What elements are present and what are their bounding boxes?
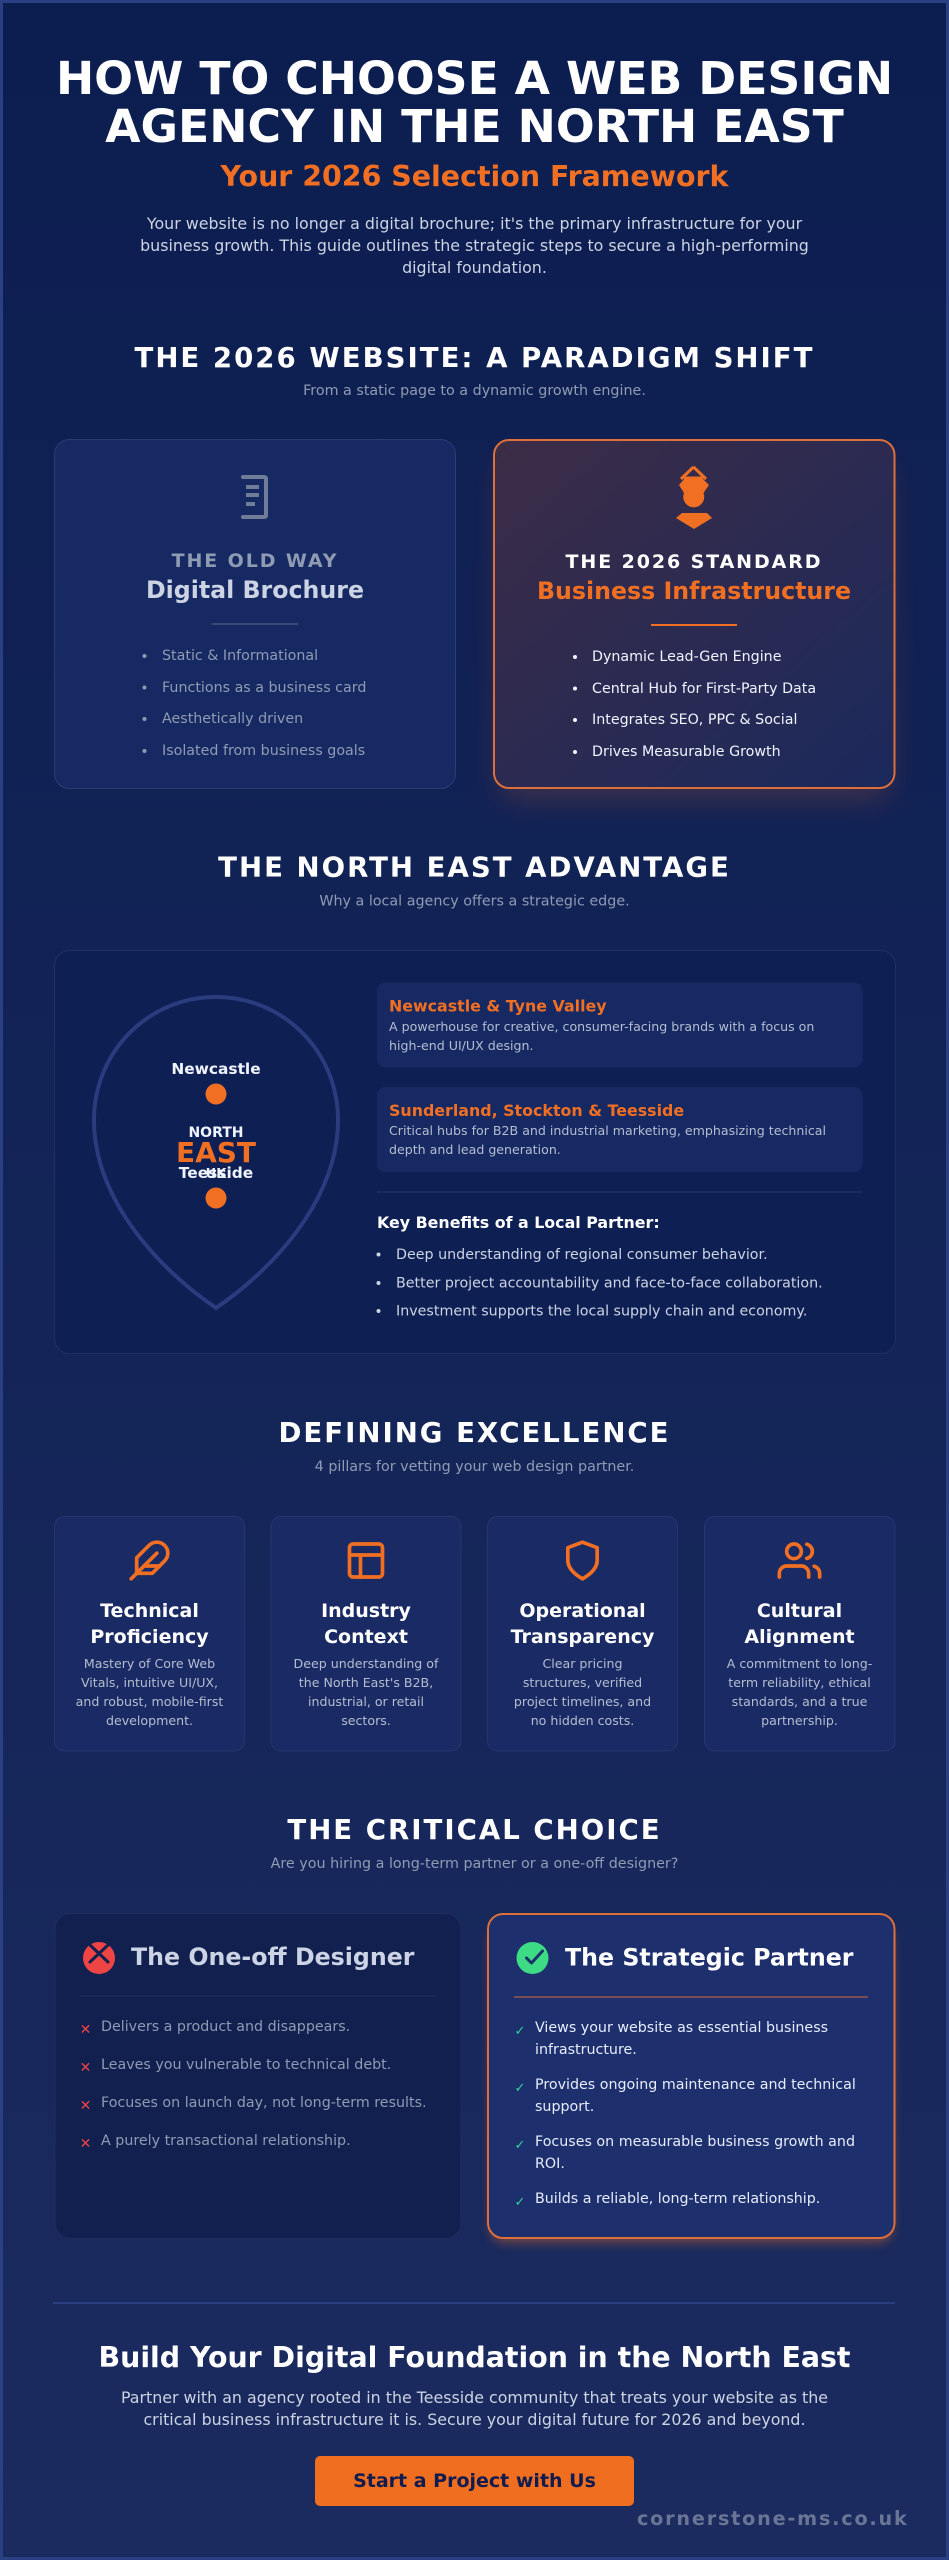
pillar: cultural alignment: standards, and a true — [732, 1694, 868, 1709]
old way list — [142, 648, 366, 759]
2026 list — [573, 649, 816, 760]
key benefits: Deep understanding of regional consumer behavior. — [396, 1247, 768, 1263]
intro text: business growth. This guide outlines the strategic steps to secure a high-performing — [140, 236, 809, 255]
pillar: technical proficiency: Mastery of Core Web — [84, 1656, 215, 1671]
key benefits: Key Benefits of a Local Partner: — [377, 1213, 660, 1232]
region card: Sunderland: depth and lead generation. — [389, 1142, 561, 1157]
panel: the 2026 standard: Business Infrastructure — [537, 577, 851, 605]
2026 list: Dynamic Lead-Gen Engine — [592, 649, 782, 665]
intro text — [140, 214, 809, 277]
title: AGENCY IN THE NORTH EAST — [105, 100, 844, 153]
panel: strategic partner — [488, 1914, 894, 2243]
header — [56, 52, 893, 277]
strategic list: ✓ — [515, 2138, 525, 2153]
strategic list: support. — [535, 2099, 594, 2115]
section heading: critical choice: Are you hiring a long-term partner or a one-off designer? — [271, 1856, 678, 1872]
pillar: operational transparency: Operational — [519, 1600, 646, 1622]
strategic list: Views your website as essential business — [535, 2020, 828, 2036]
strategic list: infrastructure. — [535, 2042, 637, 2058]
section heading: critical choice — [271, 1813, 678, 1872]
strategic list: Focuses on measurable business growth and — [535, 2134, 855, 2150]
pillar: industry context: sectors. — [341, 1713, 391, 1728]
key benefits: Investment supports the local supply chain and economy. — [396, 1304, 807, 1320]
pillar: operational transparency: project timelines, and — [514, 1694, 651, 1709]
one-off list: A purely transactional relationship. — [101, 2133, 351, 2149]
2026 heading: THE 2026 STANDARD — [566, 551, 822, 573]
section heading: defining excellence: DEFINING EXCELLENCE — [278, 1416, 671, 1449]
cta text: Partner with an agency rooted in the Teesside community that treats your website as the — [121, 2388, 828, 2407]
call to action — [98, 2341, 851, 2506]
strategic list: ✓ — [515, 2195, 525, 2210]
pillar: cultural alignment: Cultural — [757, 1600, 842, 1622]
pillar: operational transparency: Transparency — [511, 1626, 655, 1648]
icon: green check — [516, 1942, 548, 1974]
map pin — [94, 997, 338, 1308]
icon: shield — [568, 1542, 597, 1579]
strategic list: ✓ — [515, 2024, 525, 2039]
pillar: operational transparency: structures, verified — [523, 1675, 642, 1690]
pillar: industry context: Context — [324, 1626, 408, 1648]
pillar: industry context — [271, 1516, 461, 1751]
panel: the old way — [54, 440, 456, 788]
region card: Newcastle: A powerhouse for creative, consumer-facing brands with a focus on — [389, 1019, 814, 1034]
strategic list: ✓ — [515, 2081, 525, 2096]
pillar: operational transparency — [488, 1516, 678, 1751]
pillar: cultural alignment: term reliability, ethical — [728, 1675, 871, 1690]
pillar: cultural alignment: Alignment — [744, 1626, 855, 1648]
pillar: operational transparency: no hidden costs. — [531, 1713, 634, 1728]
map pin: Newcastle — [171, 1060, 261, 1078]
strategic list — [515, 2020, 856, 2210]
section heading: north east advantage: Why a local agency offers a strategic edge. — [319, 894, 630, 910]
title — [56, 52, 893, 153]
cta text: critical business infrastructure it is. Secure your digital future for 2026 and beyond. — [143, 2410, 806, 2429]
one-off list — [80, 2019, 427, 2152]
section heading: north east advantage — [218, 850, 731, 910]
map pin: NORTH — [188, 1125, 244, 1141]
region card: Sunderland — [377, 1087, 862, 1172]
section heading: paradigm shift: THE 2026 WEBSITE: A PARADIGM SHIFT — [135, 341, 814, 374]
icon: users — [779, 1544, 820, 1577]
one-off list: ✕ — [80, 2098, 91, 2114]
region card: Newcastle — [377, 982, 862, 1068]
panel: the 2026 standard — [494, 440, 894, 800]
old way heading: THE OLD WAY — [172, 550, 338, 572]
key benefits: Better project accountability and face-to-face collaboration. — [396, 1276, 823, 1292]
cta heading: Build Your Digital Foundation in the North East — [98, 2341, 851, 2374]
map pin: UK — [206, 1167, 227, 1182]
strategic list: ROI. — [535, 2156, 565, 2172]
section heading: defining excellence — [278, 1416, 671, 1475]
pillar: industry context: Industry — [321, 1600, 412, 1622]
cta text — [121, 2388, 828, 2429]
one-off list: Leaves you vulnerable to technical debt. — [101, 2057, 391, 2073]
panel: one-off designer: The One-off Designer — [131, 1943, 415, 1971]
pillar: industry context: industrial, or retail — [308, 1694, 424, 1709]
panel: the old way: Digital Brochure — [146, 576, 364, 604]
intro text: Your website is no longer a digital brochure; it's the primary infrastructure for your — [146, 214, 803, 233]
map pin: Teesside — [179, 1164, 253, 1182]
section heading: defining excellence: 4 pillars for vetting your web design partner. — [315, 1459, 634, 1475]
pillar: cultural alignment — [704, 1516, 895, 1751]
strategic list: Provides ongoing maintenance and technical — [535, 2077, 856, 2093]
section heading: paradigm shift — [135, 341, 814, 399]
pillar: technical proficiency: development. — [106, 1713, 193, 1728]
old way list: Static & Informational — [162, 648, 318, 664]
strategic list: Builds a reliable, long-term relationship. — [535, 2191, 820, 2207]
region card: Sunderland: Sunderland, Stockton & Teesside — [389, 1101, 684, 1120]
cta button — [315, 2456, 634, 2506]
pillar: technical proficiency: Vitals, intuitive UI/UX, — [81, 1675, 218, 1690]
one-off list: Focuses on launch day, not long-term results. — [101, 2095, 427, 2111]
2026 list: Integrates SEO, PPC & Social — [592, 712, 797, 728]
one-off list: ✕ — [80, 2060, 91, 2076]
pillar: cultural alignment: partnership. — [761, 1713, 838, 1728]
intro text: digital foundation. — [402, 258, 547, 277]
icon: layout — [349, 1544, 382, 1577]
2026 list: Drives Measurable Growth — [592, 744, 781, 760]
pillar: technical proficiency: Proficiency — [90, 1626, 209, 1648]
pillar: technical proficiency: Technical — [100, 1600, 199, 1622]
2026 list: Central Hub for First-Party Data — [592, 681, 816, 697]
pillar: operational transparency: Clear pricing — [542, 1656, 623, 1671]
old way list: Functions as a business card — [162, 680, 366, 696]
icon: red cross — [83, 1942, 115, 1974]
map pin: EAST — [176, 1136, 256, 1169]
section heading: north east advantage: THE NORTH EAST ADVANTAGE — [218, 850, 731, 884]
icon: rocket — [676, 467, 712, 529]
old way list: Isolated from business goals — [162, 743, 365, 759]
panel: north east advantage — [54, 950, 896, 1354]
pillar: industry context: Deep understanding of — [294, 1656, 439, 1671]
section heading: paradigm shift: From a static page to a dynamic growth engine. — [303, 383, 646, 399]
panel: strategic partner: The Strategic Partner — [565, 1944, 854, 1972]
key benefits — [376, 1213, 823, 1320]
region card: Sunderland: Critical hubs for B2B and industrial marketing, emphasizing technical — [389, 1123, 826, 1138]
subtitle: Your 2026 Selection Framework — [220, 160, 730, 193]
pillar: technical proficiency — [54, 1516, 244, 1751]
one-off list: ✕ — [80, 2136, 91, 2152]
section heading: critical choice: THE CRITICAL CHOICE — [287, 1813, 662, 1846]
icon: document — [243, 477, 266, 517]
region card: Newcastle: high-end UI/UX design. — [389, 1038, 534, 1053]
watermark: cornerstone-ms.co.uk — [637, 2507, 909, 2530]
cta button: Start a Project with Us — [353, 2470, 596, 2492]
one-off list: Delivers a product and disappears. — [101, 2019, 350, 2035]
panel: one-off designer — [55, 1914, 461, 2238]
title: HOW TO CHOOSE A WEB DESIGN — [56, 52, 893, 105]
region card: Newcastle: Newcastle & Tyne Valley — [389, 996, 607, 1016]
one-off list: ✕ — [80, 2022, 91, 2038]
pillar: industry context: the North East's B2B, — [299, 1675, 433, 1690]
icon: feather — [131, 1542, 168, 1579]
pillar: cultural alignment: A commitment to long- — [727, 1656, 872, 1671]
old way list: Aesthetically driven — [162, 711, 303, 727]
pillar: technical proficiency: and robust, mobile-first — [76, 1694, 223, 1709]
